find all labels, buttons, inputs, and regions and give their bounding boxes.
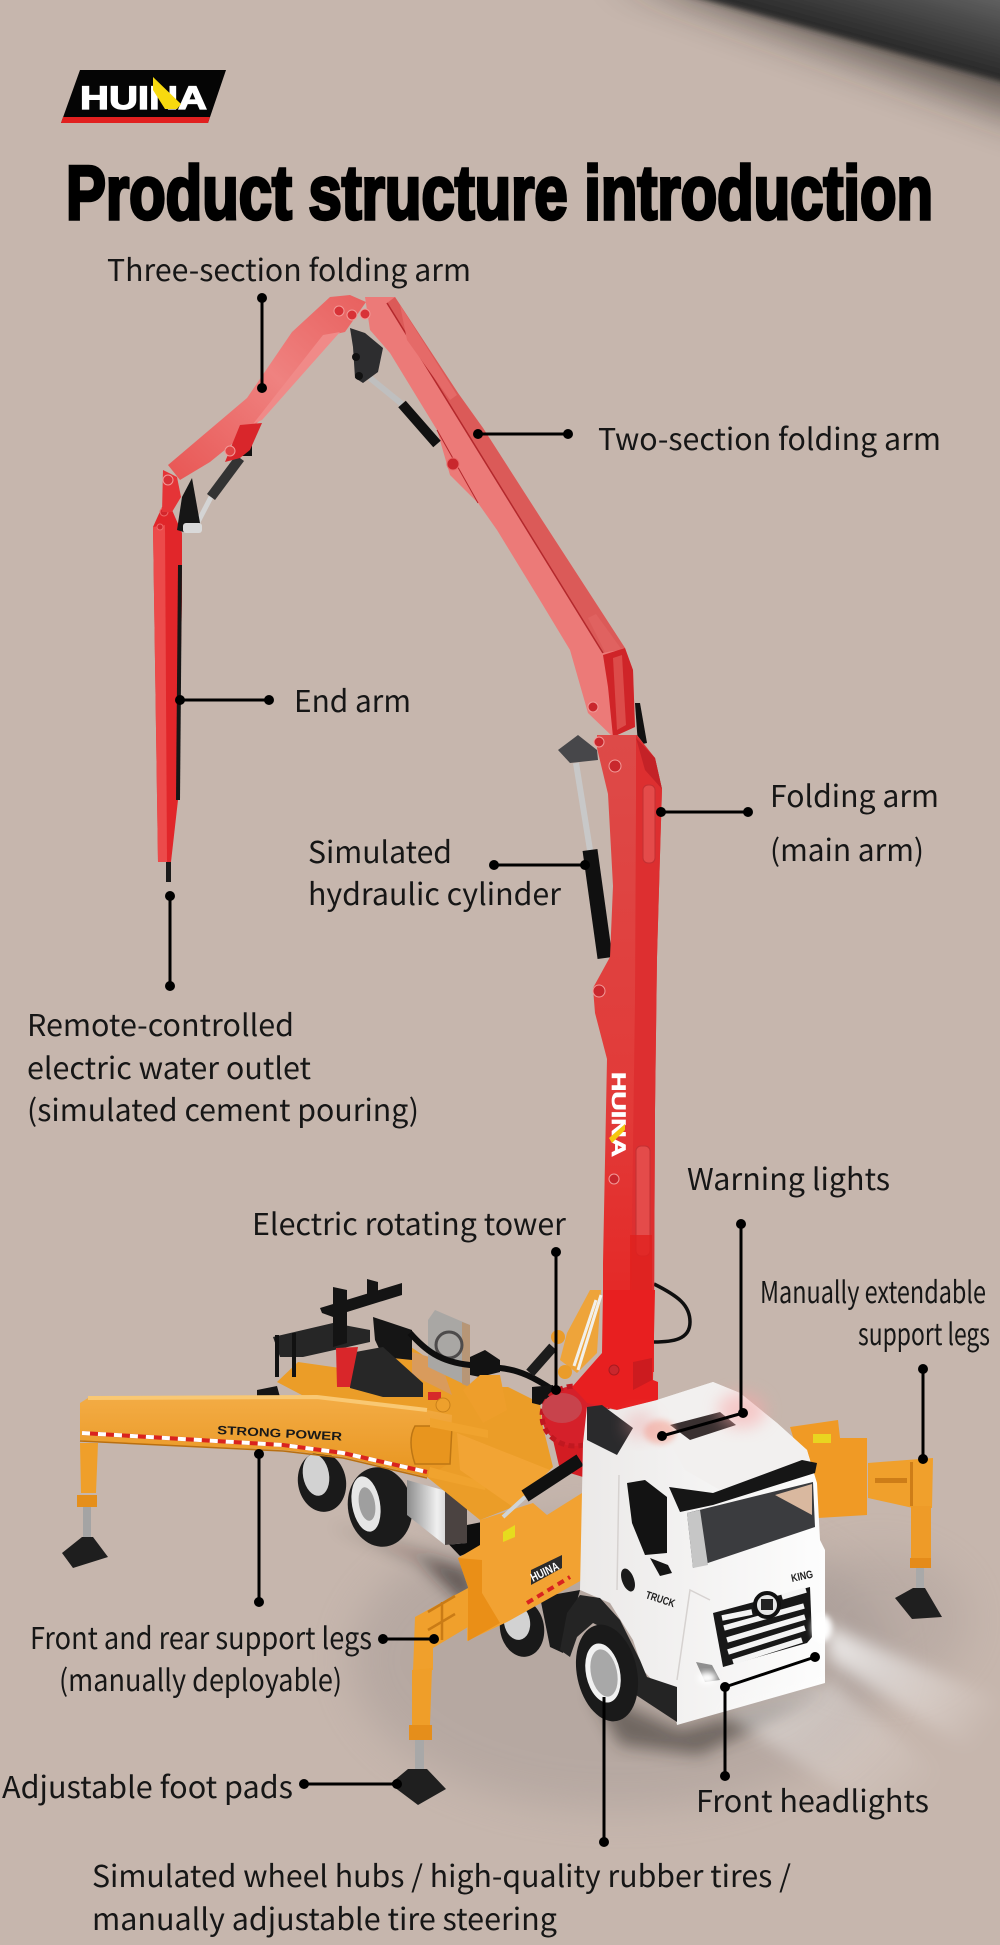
- leader: folding main arm: [656, 807, 753, 817]
- three-section folding arm: [162, 295, 366, 512]
- label: front and rear support legs: Front and rear support legs: [30, 1614, 372, 1658]
- leader: warning lights: [657, 1219, 748, 1441]
- leader: electric rotating tower: [551, 1247, 561, 1395]
- label: wheel hubs and tires: [92, 1852, 791, 1939]
- label: simulated hydraulic cylinder: [308, 828, 561, 914]
- white cab: [560, 1382, 825, 1727]
- main hydraulic cylinder: [576, 703, 647, 958]
- front grille: [713, 1587, 812, 1667]
- rear wheels: [293, 1448, 418, 1552]
- tip hydraulic bracket: [177, 478, 202, 533]
- warning lights: [624, 1392, 766, 1444]
- turret and rotating ring: [542, 1290, 658, 1477]
- door handle and decal: KING: [790, 1569, 814, 1585]
- label: front and rear support legs: (manually deployable): [59, 1656, 342, 1700]
- deck support legs: [257, 1386, 280, 1397]
- floor shading: [330, 1510, 970, 1810]
- door handle and decal: TRUCK: [644, 1589, 676, 1610]
- leader: front headlights: [720, 1652, 820, 1781]
- end arm: [153, 507, 182, 882]
- leader: water outlet: [165, 891, 175, 991]
- label: warning lights: Warning lights: [687, 1155, 890, 1199]
- main cylinder bracket: [558, 735, 598, 763]
- cable loop: [654, 1284, 690, 1342]
- leader: front and rear support legs: [254, 1449, 439, 1644]
- folding main arm: [593, 735, 662, 1372]
- label: manually extendable support legs: [760, 1268, 990, 1354]
- rear equipment: [273, 1279, 553, 1405]
- chassis fuel tank: [407, 1480, 482, 1556]
- rear outrigger arm: [62, 1397, 452, 1568]
- label: folding main arm: Folding arm: [770, 772, 939, 816]
- label: remote-controlled electric water outlet: Remote-controlled: [27, 1001, 294, 1045]
- tip hydraulic cylinder: [198, 442, 252, 522]
- label: remote-controlled electric water outlet: [27, 1001, 419, 1130]
- leader: simulated hydraulic cylinder: [489, 860, 590, 870]
- leader: end arm: [175, 695, 274, 705]
- rear outrigger arm: STRONG POWER: [217, 1423, 343, 1444]
- leader: manually extendable support legs: [918, 1364, 928, 1464]
- label: three-section folding arm: Three-section folding arm: [107, 246, 471, 290]
- leader: wheel hubs and tires: [599, 1697, 609, 1847]
- upper hydraulic cylinder: [350, 328, 437, 444]
- front wheel arch: [560, 1595, 677, 1722]
- label: remote-controlled electric water outlet: electric water outlet: [27, 1044, 311, 1088]
- windshield: [687, 1482, 815, 1568]
- front wheel: [567, 1619, 647, 1727]
- front left outrigger: [390, 1460, 582, 1805]
- label: front and rear support legs: [30, 1614, 372, 1700]
- second axle wheel and chassis: [495, 1590, 580, 1660]
- product: concrete pump truck model: [62, 295, 1000, 1815]
- hinge brackets and pivot hump: [428, 1375, 550, 1507]
- brand logo: [61, 70, 226, 123]
- label: simulated hydraulic cylinder: hydraulic cylinder: [308, 870, 561, 914]
- front left outrigger: HUINA: [528, 1559, 562, 1585]
- front headlight: [696, 1662, 720, 1682]
- rear deck: [277, 1345, 553, 1520]
- label: wheel hubs and tires: Simulated wheel hubs / high-quality rubber tires /: [92, 1852, 791, 1896]
- leader: adjustable foot pads: [299, 1779, 402, 1789]
- side mirror: [627, 1480, 667, 1555]
- label: end arm: End arm: [294, 677, 411, 721]
- label: folding main arm: [770, 772, 939, 870]
- label: simulated hydraulic cylinder: Simulated: [308, 828, 452, 872]
- door handle and decal: [618, 1567, 814, 1610]
- label: adjustable foot pads: Adjustable foot pads: [2, 1763, 293, 1807]
- label: electric rotating tower: Electric rotating tower: [252, 1200, 566, 1244]
- label: wheel hubs and tires: manually adjustable tire steering: [92, 1895, 557, 1939]
- boom tower support: [530, 1290, 601, 1379]
- brand logo: HUINA: [80, 80, 207, 116]
- dark corner shadow: [610, 0, 1000, 125]
- arm logo: HUINA: [607, 1072, 628, 1157]
- right outrigger: [790, 1420, 942, 1619]
- label: folding main arm: (main arm): [770, 826, 924, 870]
- windshield visor: [669, 1460, 817, 1512]
- label: front headlights: Front headlights: [696, 1777, 929, 1821]
- label: two-section folding arm: Two-section folding arm: [598, 415, 941, 459]
- roof light bar: [587, 1405, 633, 1455]
- leader: three-section folding arm: [257, 293, 267, 393]
- label: remote-controlled electric water outlet: (simulated cement pouring): [27, 1086, 419, 1130]
- headlight beams: [725, 1614, 1000, 1815]
- leader: two-section folding arm: [473, 429, 573, 439]
- two-section folding arm: [360, 297, 635, 737]
